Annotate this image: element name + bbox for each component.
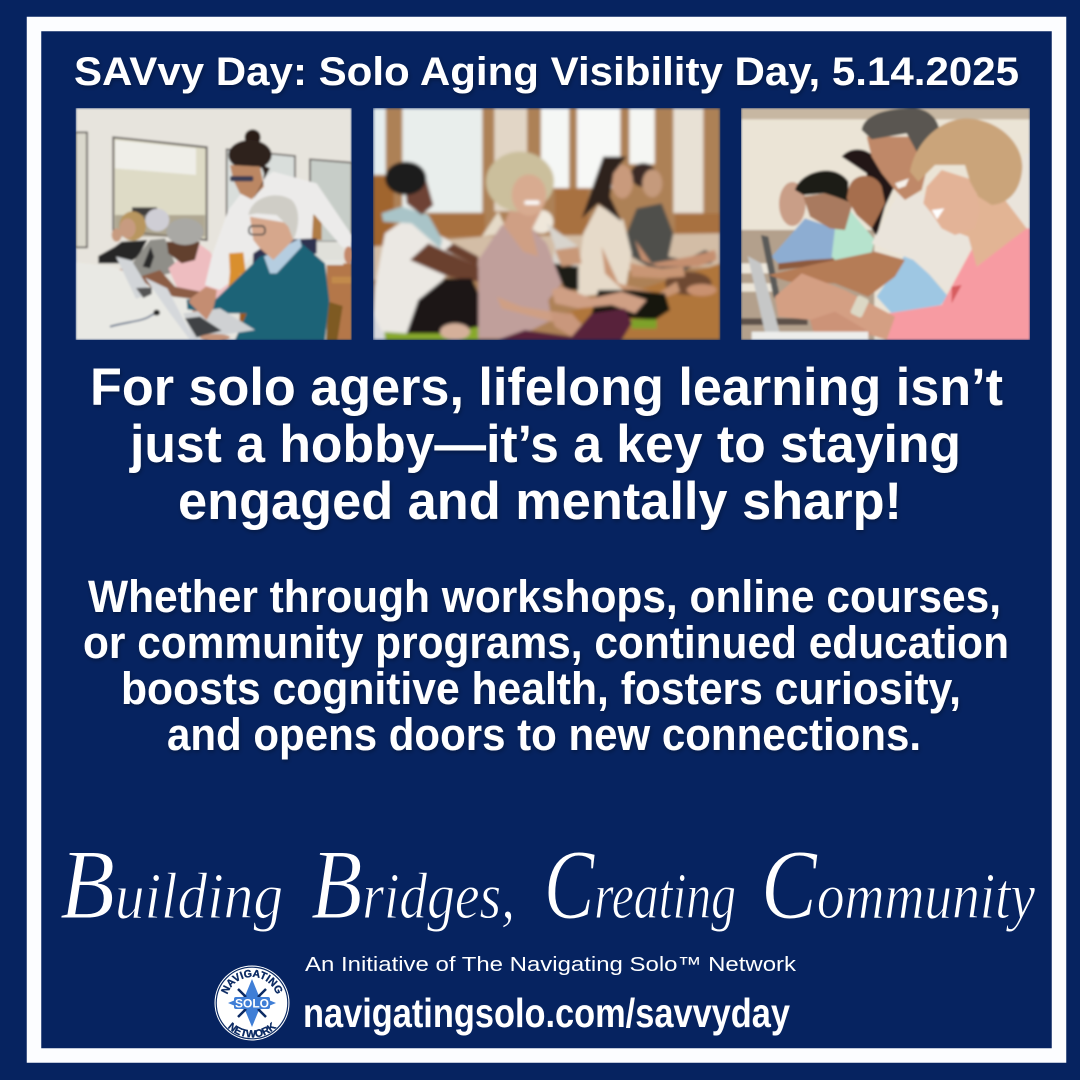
background woman with dark top — [627, 203, 717, 277]
blond background figure — [530, 210, 553, 233]
photo: older adults learning on laptops with a young instructor — [76, 108, 353, 341]
script tagline — [60, 829, 1036, 940]
logo: Navigating Solo Network compass: NAVIGATING — [220, 970, 282, 994]
instructor — [205, 172, 352, 290]
script tagline: Bridges, — [311, 829, 515, 940]
laptop 1 — [116, 257, 152, 299]
woman dark hair — [842, 149, 894, 237]
foreground laptop — [747, 256, 780, 332]
title: SAVvy Day: Solo Aging Visibility Day, 5.14.2025 — [74, 50, 1019, 94]
script tagline: Creating — [544, 829, 736, 940]
main heading: engaged and mentally sharp! — [178, 472, 902, 531]
man in mint — [832, 208, 875, 263]
logo: Navigating Solo Network compass: SOLO — [235, 996, 269, 1010]
body paragraph — [83, 571, 1009, 760]
body paragraph: Whether through workshops, online courses, — [88, 571, 1001, 622]
photo: woman and man pointing at a laptop — [741, 108, 1030, 340]
laptop dark — [760, 234, 780, 299]
far-left man — [772, 218, 835, 263]
far woman — [98, 240, 147, 263]
photo: seniors smiling in a meditation class — [373, 108, 720, 340]
blue shirt behind — [876, 256, 948, 314]
woman pink — [887, 228, 1030, 340]
laptop 2 — [145, 278, 193, 340]
initiative line: An Initiative of The Navigating Solo™ Network — [305, 953, 797, 976]
body paragraph: or community programs, continued education — [83, 617, 1009, 668]
green mat — [384, 327, 478, 340]
man white polo — [871, 230, 928, 273]
website URL: navigatingsolo.com/savvyday — [303, 990, 790, 1036]
main heading: just a hobby—it’s a key to staying — [129, 415, 961, 474]
logo: Navigating Solo Network compass — [214, 966, 290, 1040]
table — [76, 264, 128, 339]
main heading: For solo agers, lifelong learning isn’t — [90, 358, 1003, 417]
main heading — [90, 358, 1003, 531]
body paragraph: and opens doors to new connections. — [167, 709, 921, 760]
black man — [167, 244, 230, 300]
logo: Navigating Solo Network compass: NETWORK — [228, 1022, 277, 1038]
script tagline: Building — [60, 829, 283, 940]
old man teal sweater — [187, 243, 329, 340]
left woman — [373, 218, 455, 333]
background woman cream top — [577, 205, 632, 297]
script tagline: Community — [761, 829, 1036, 940]
central smiling woman — [478, 225, 562, 338]
orange chairs — [229, 252, 246, 275]
body paragraph: boosts cognitive health, fosters curiosity, — [121, 663, 961, 714]
grey-haired person — [128, 238, 175, 280]
